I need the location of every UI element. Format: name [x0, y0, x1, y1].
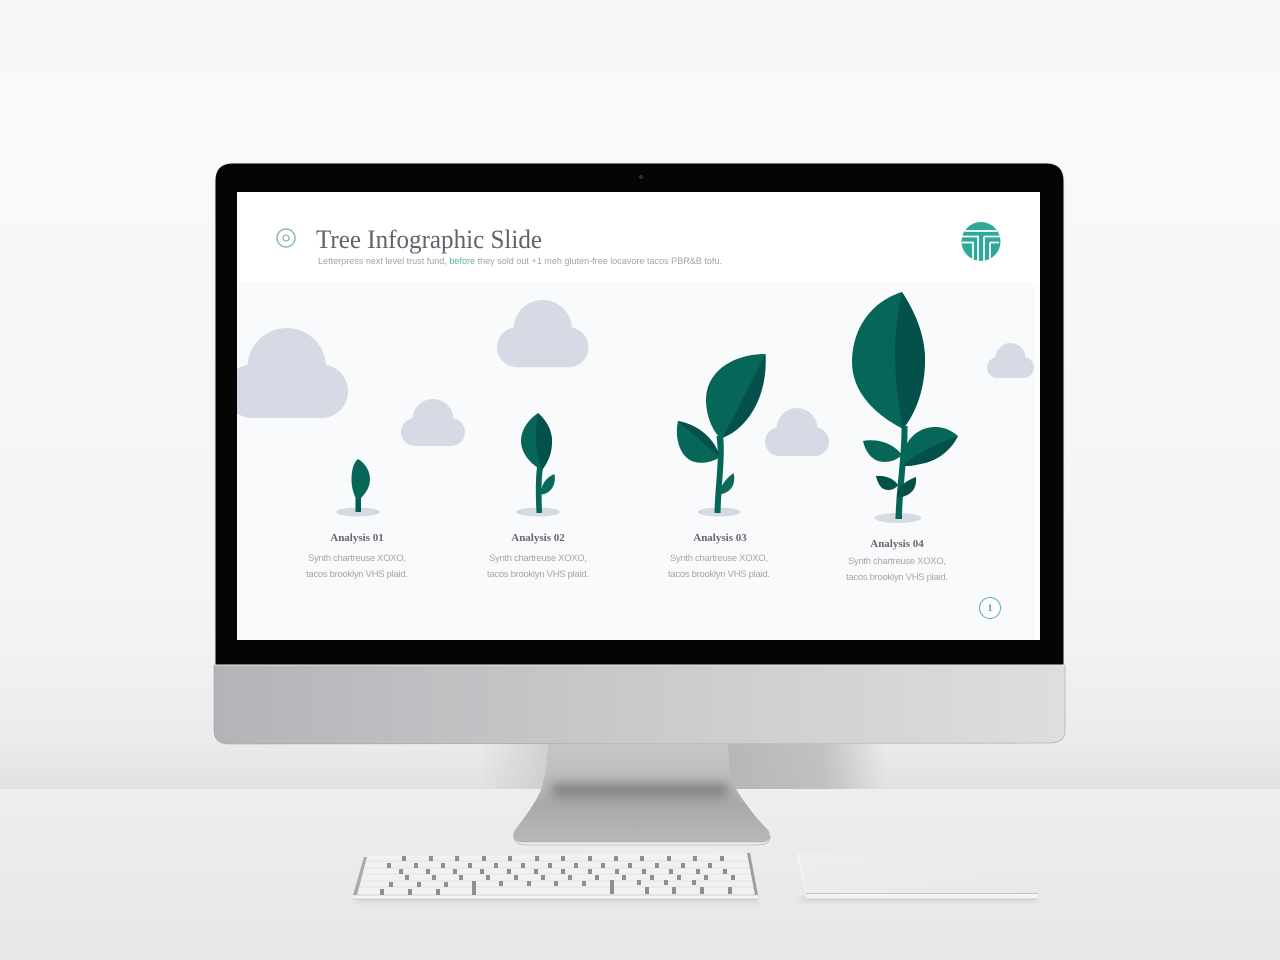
icon: logo — [962, 222, 1000, 261]
stem 4 — [896, 426, 908, 519]
slide — [226, 192, 1040, 640]
caption 2: Synth chartreuse XOXO, — [489, 553, 587, 564]
caption 3 — [668, 532, 770, 580]
trackpad — [797, 853, 1038, 902]
camera — [639, 175, 643, 179]
caption 2 — [487, 532, 589, 580]
cloud 3 — [401, 399, 465, 446]
right leaf 4 — [903, 427, 958, 466]
lower right leaf 4 — [897, 477, 916, 498]
stand shadow on wall — [502, 744, 872, 789]
caption 1: tacos brooklyn VHS plaid. — [306, 569, 408, 580]
small leaf 3 — [720, 473, 734, 494]
main leaf 4 — [852, 292, 925, 429]
page number — [980, 598, 1000, 618]
caption 4: Synth chartreuse XOXO, — [848, 556, 946, 567]
desk surface — [0, 789, 1280, 960]
leaf 3 left shade — [678, 421, 720, 457]
monitor stand — [513, 744, 770, 845]
leaf 3 main shade — [722, 354, 766, 438]
leaf 2 shade — [536, 413, 552, 470]
caption 1 — [306, 532, 408, 580]
monitor bezel — [215, 163, 1064, 665]
caption 2: Analysis 02 — [511, 532, 565, 544]
cloud 1 — [226, 328, 348, 418]
shadow 3 — [698, 508, 740, 516]
monitor chin — [214, 665, 1065, 744]
stem 2 — [536, 464, 544, 513]
plant 3 — [677, 354, 766, 516]
left leaf 4 — [863, 440, 902, 462]
small leaf 2 — [541, 474, 555, 494]
caption 4: Analysis 04 — [870, 538, 924, 550]
shadow 2 — [516, 508, 560, 516]
icon: target — [277, 229, 295, 247]
caption 3: Synth chartreuse XOXO, — [670, 553, 768, 564]
leaf 3 left — [677, 421, 720, 463]
subtitle: Letterpress next level trust fund, before they sold out +1 meh gluten-free locavore tacos PBR&B tofu. — [318, 256, 722, 266]
leaf 2 — [521, 413, 552, 470]
main leaf 4 shade — [895, 292, 925, 429]
caption 3: tacos brooklyn VHS plaid. — [668, 569, 770, 580]
stem 1 — [356, 494, 361, 512]
plant 1 — [336, 459, 380, 516]
slide bottom edge — [1034, 282, 1040, 640]
shadow 4 — [874, 513, 922, 523]
right leaf 4 shade — [903, 436, 958, 466]
caption 3: Analysis 03 — [693, 532, 747, 544]
title: Tree Infographic Slide — [316, 225, 542, 254]
caption 4: tacos brooklyn VHS plaid. — [846, 572, 948, 583]
shadow 1 — [336, 508, 380, 516]
content panel — [237, 282, 1034, 640]
leaf 1 — [352, 459, 370, 499]
cloud 5 — [987, 343, 1034, 378]
caption 1: Synth chartreuse XOXO, — [308, 553, 406, 564]
caption 1: Analysis 01 — [330, 532, 384, 544]
slide background — [237, 192, 1040, 282]
lower left leaf 4 — [876, 476, 898, 490]
cloud 2 — [497, 300, 589, 367]
cloud 4 — [765, 408, 829, 456]
page number: 1 — [988, 603, 993, 613]
leaf 3 main — [706, 354, 766, 438]
plant 2 — [516, 413, 560, 516]
stem 3 — [714, 436, 724, 513]
caption 2: tacos brooklyn VHS plaid. — [487, 569, 589, 580]
keyboard — [353, 853, 758, 903]
caption 4 — [846, 538, 948, 583]
plant 4 — [852, 292, 958, 523]
